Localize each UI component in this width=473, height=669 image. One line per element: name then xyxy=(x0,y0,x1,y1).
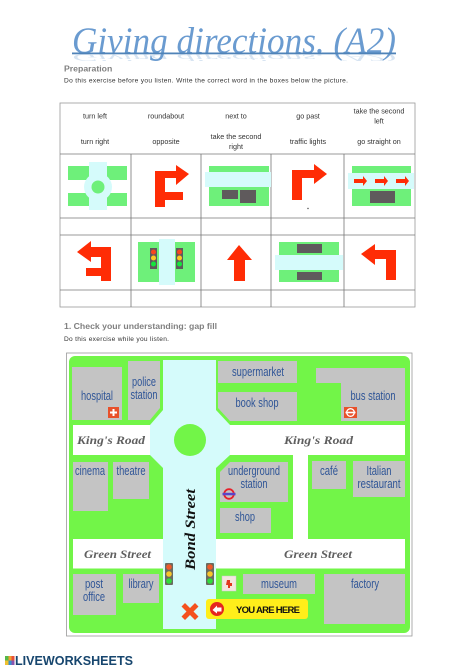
word bank: take the second xyxy=(211,132,261,141)
word bank: go straight on xyxy=(357,137,401,146)
building: book shop: book shop xyxy=(236,396,279,410)
building: underground station xyxy=(220,462,288,502)
logo squares xyxy=(5,656,14,665)
building: post office: office xyxy=(83,590,105,604)
building: post office xyxy=(73,574,116,615)
building: hospital: hospital xyxy=(81,389,113,403)
word bank: turn left xyxy=(83,112,107,120)
building: factory: factory xyxy=(351,577,380,591)
icon: next to xyxy=(205,166,271,206)
icon: roundabout xyxy=(68,162,127,210)
table grid xyxy=(60,103,415,307)
building: italian restaurant: restaurant xyxy=(358,477,401,491)
building: cafe: café xyxy=(320,464,338,478)
word bank: turn right xyxy=(81,137,109,146)
word bank xyxy=(81,106,404,151)
road label: green street left: Green Street xyxy=(84,547,152,561)
word bank: traffic lights xyxy=(290,137,327,146)
building: shop xyxy=(220,508,271,533)
icon: turn right arrow xyxy=(292,164,327,200)
building: museum xyxy=(243,574,315,594)
building: theatre xyxy=(113,462,149,499)
word bank: take the second xyxy=(354,106,404,116)
building: post office: post xyxy=(85,577,103,591)
building: italian restaurant xyxy=(353,461,405,497)
icon: museum sign xyxy=(222,576,236,591)
icon: red cross marker xyxy=(182,603,198,620)
building: factory xyxy=(324,574,405,624)
road: side street xyxy=(293,455,308,539)
word bank: roundabout xyxy=(148,112,184,120)
building: police station: station xyxy=(130,388,158,402)
word bank: right xyxy=(229,142,243,151)
building: bus station xyxy=(316,368,405,421)
section heading: preparation: Preparation xyxy=(64,64,112,74)
instruction text: gap fill: Do this exercise while you listen. xyxy=(64,336,169,343)
building: library: library xyxy=(128,577,154,591)
building: police station: police xyxy=(132,375,156,389)
word bank: opposite xyxy=(152,137,180,146)
building: book shop xyxy=(218,392,297,421)
icon: go straight on arrow xyxy=(227,245,252,281)
you are here sign xyxy=(206,599,308,619)
building: supermarket: supermarket xyxy=(232,365,284,379)
traffic light: right xyxy=(206,563,214,585)
icon: turn left arrow xyxy=(361,244,396,280)
building: italian restaurant: Italian xyxy=(366,464,392,478)
exercise table xyxy=(60,103,415,307)
building: supermarket xyxy=(218,361,297,383)
icon: take the second left arrow xyxy=(77,241,111,281)
footer logo: liveworksheets: LIVEWORKSHEETS xyxy=(15,654,133,668)
word bank: go past xyxy=(296,112,320,120)
building: museum: museum xyxy=(261,577,297,591)
building: underground station: station xyxy=(240,477,268,491)
icon: traffic lights xyxy=(138,239,195,285)
building: cinema xyxy=(73,462,108,511)
building: cinema: cinema xyxy=(75,464,105,478)
building: library xyxy=(123,574,159,603)
building: police station xyxy=(128,361,160,420)
road label: green street right: Green Street xyxy=(284,547,353,561)
traffic light: left xyxy=(165,563,173,585)
you are here sign: YOU ARE HERE xyxy=(236,605,300,616)
section heading: gap fill: 1. Check your understanding: gap fill xyxy=(64,321,217,331)
title: Giving directions. (A2) xyxy=(72,52,396,62)
instruction text: preparation: Do this exercise before you listen. Write the correct word in the boxes below the picture. xyxy=(64,78,348,84)
map frame xyxy=(66,353,412,636)
road label: king's road left: King's Road xyxy=(76,433,146,447)
street map xyxy=(66,353,412,636)
stray dot xyxy=(307,208,309,209)
building: cafe xyxy=(312,461,346,489)
word bank: left xyxy=(374,116,384,126)
road: king's road xyxy=(73,425,405,455)
icon: take the second right arrow xyxy=(155,165,189,207)
title: Giving directions. (A2) xyxy=(72,21,396,62)
icon: opposite xyxy=(275,242,343,282)
building: bus station: bus station xyxy=(350,389,396,403)
road label: king's road right: King's Road xyxy=(283,433,354,447)
road label: bond street: Bond Street xyxy=(183,488,199,571)
road: bond street with roundabout xyxy=(150,360,230,629)
building: theatre: theatre xyxy=(116,464,146,478)
icon: go past xyxy=(348,166,414,206)
building: underground station: underground xyxy=(228,464,280,478)
building: shop: shop xyxy=(235,510,255,524)
building: hospital xyxy=(72,367,122,420)
word bank: next to xyxy=(225,112,247,120)
map ground xyxy=(69,356,410,633)
road: green street xyxy=(73,539,405,568)
